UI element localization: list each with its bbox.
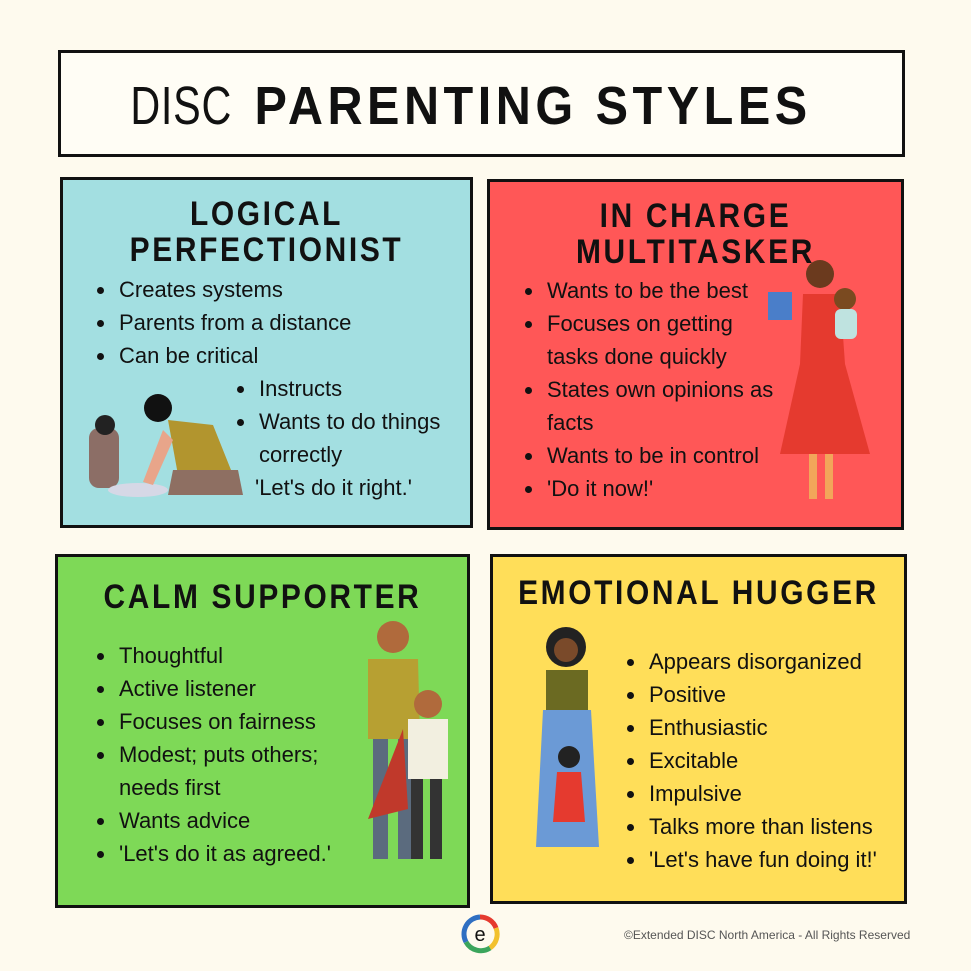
- bullets: 'Let's have fun doing it!': [649, 847, 877, 872]
- bullets: Impulsive: [649, 781, 742, 806]
- bullets: [97, 643, 331, 866]
- bullets: Focuses on fairness: [119, 709, 316, 734]
- bullets: [97, 277, 351, 368]
- illustration: father and son: [368, 621, 448, 859]
- bullets: Wants to be in control: [547, 443, 759, 468]
- bullets: Can be critical: [119, 343, 258, 368]
- panel: in charge multitasker: [487, 179, 904, 530]
- bullets: Focuses on getting tasks done quickly: [547, 311, 733, 369]
- copyright: ©Extended DISC North America - All Rights Reserved: [624, 928, 910, 942]
- bullets: Enthusiastic: [649, 715, 768, 740]
- bullets: Positive: [649, 682, 726, 707]
- icon: extended disc logo: e: [474, 924, 486, 946]
- heading: EMOTIONAL HUGGER: [518, 574, 879, 612]
- illustration: mother with book and child: [768, 260, 870, 499]
- bullets: Talks more than listens: [649, 814, 873, 839]
- heading: [576, 197, 815, 271]
- bullets: Wants advice: [119, 808, 250, 833]
- bullets 2: Instructs: [259, 376, 342, 401]
- bullets 2: Wants to do things correctly: [259, 409, 440, 467]
- heading: [130, 195, 403, 269]
- heading: CALM SUPPORTER: [104, 578, 421, 616]
- bullets: Creates systems: [119, 277, 283, 302]
- bullets: Parents from a distance: [119, 310, 351, 335]
- bullets: States own opinions as facts: [547, 377, 773, 435]
- panel: emotional hugger: [490, 554, 907, 904]
- bullets: Active listener: [119, 676, 256, 701]
- bullets: Excitable: [649, 748, 738, 773]
- title box: [58, 50, 905, 157]
- title: PARENTING STYLES: [255, 76, 812, 136]
- bullets: Thoughtful: [119, 643, 223, 668]
- panel: calm supporter: [55, 554, 470, 908]
- bullets: [627, 649, 877, 872]
- panel: logical perfectionist: [60, 177, 473, 528]
- title: DISC: [130, 76, 232, 136]
- illustration: father and child: [89, 394, 243, 497]
- bullets: Appears disorganized: [649, 649, 862, 674]
- bullets: 'Do it now!': [547, 476, 653, 501]
- bullets: [525, 278, 773, 501]
- bullets: 'Let's do it as agreed.': [119, 841, 331, 866]
- heading: IN CHARGE: [600, 197, 791, 235]
- icon: extended disc logo: [462, 914, 500, 954]
- heading: LOGICAL: [190, 195, 343, 233]
- bullets 2: [237, 376, 440, 500]
- bullets: Wants to be the best: [547, 278, 748, 303]
- illustration: mother and daughter: [536, 627, 599, 847]
- bullets: Modest; puts others; needs first: [119, 742, 318, 800]
- heading: MULTITASKER: [576, 233, 815, 271]
- bullets 2: 'Let's do it right.': [255, 475, 412, 500]
- heading: PERFECTIONIST: [130, 231, 403, 269]
